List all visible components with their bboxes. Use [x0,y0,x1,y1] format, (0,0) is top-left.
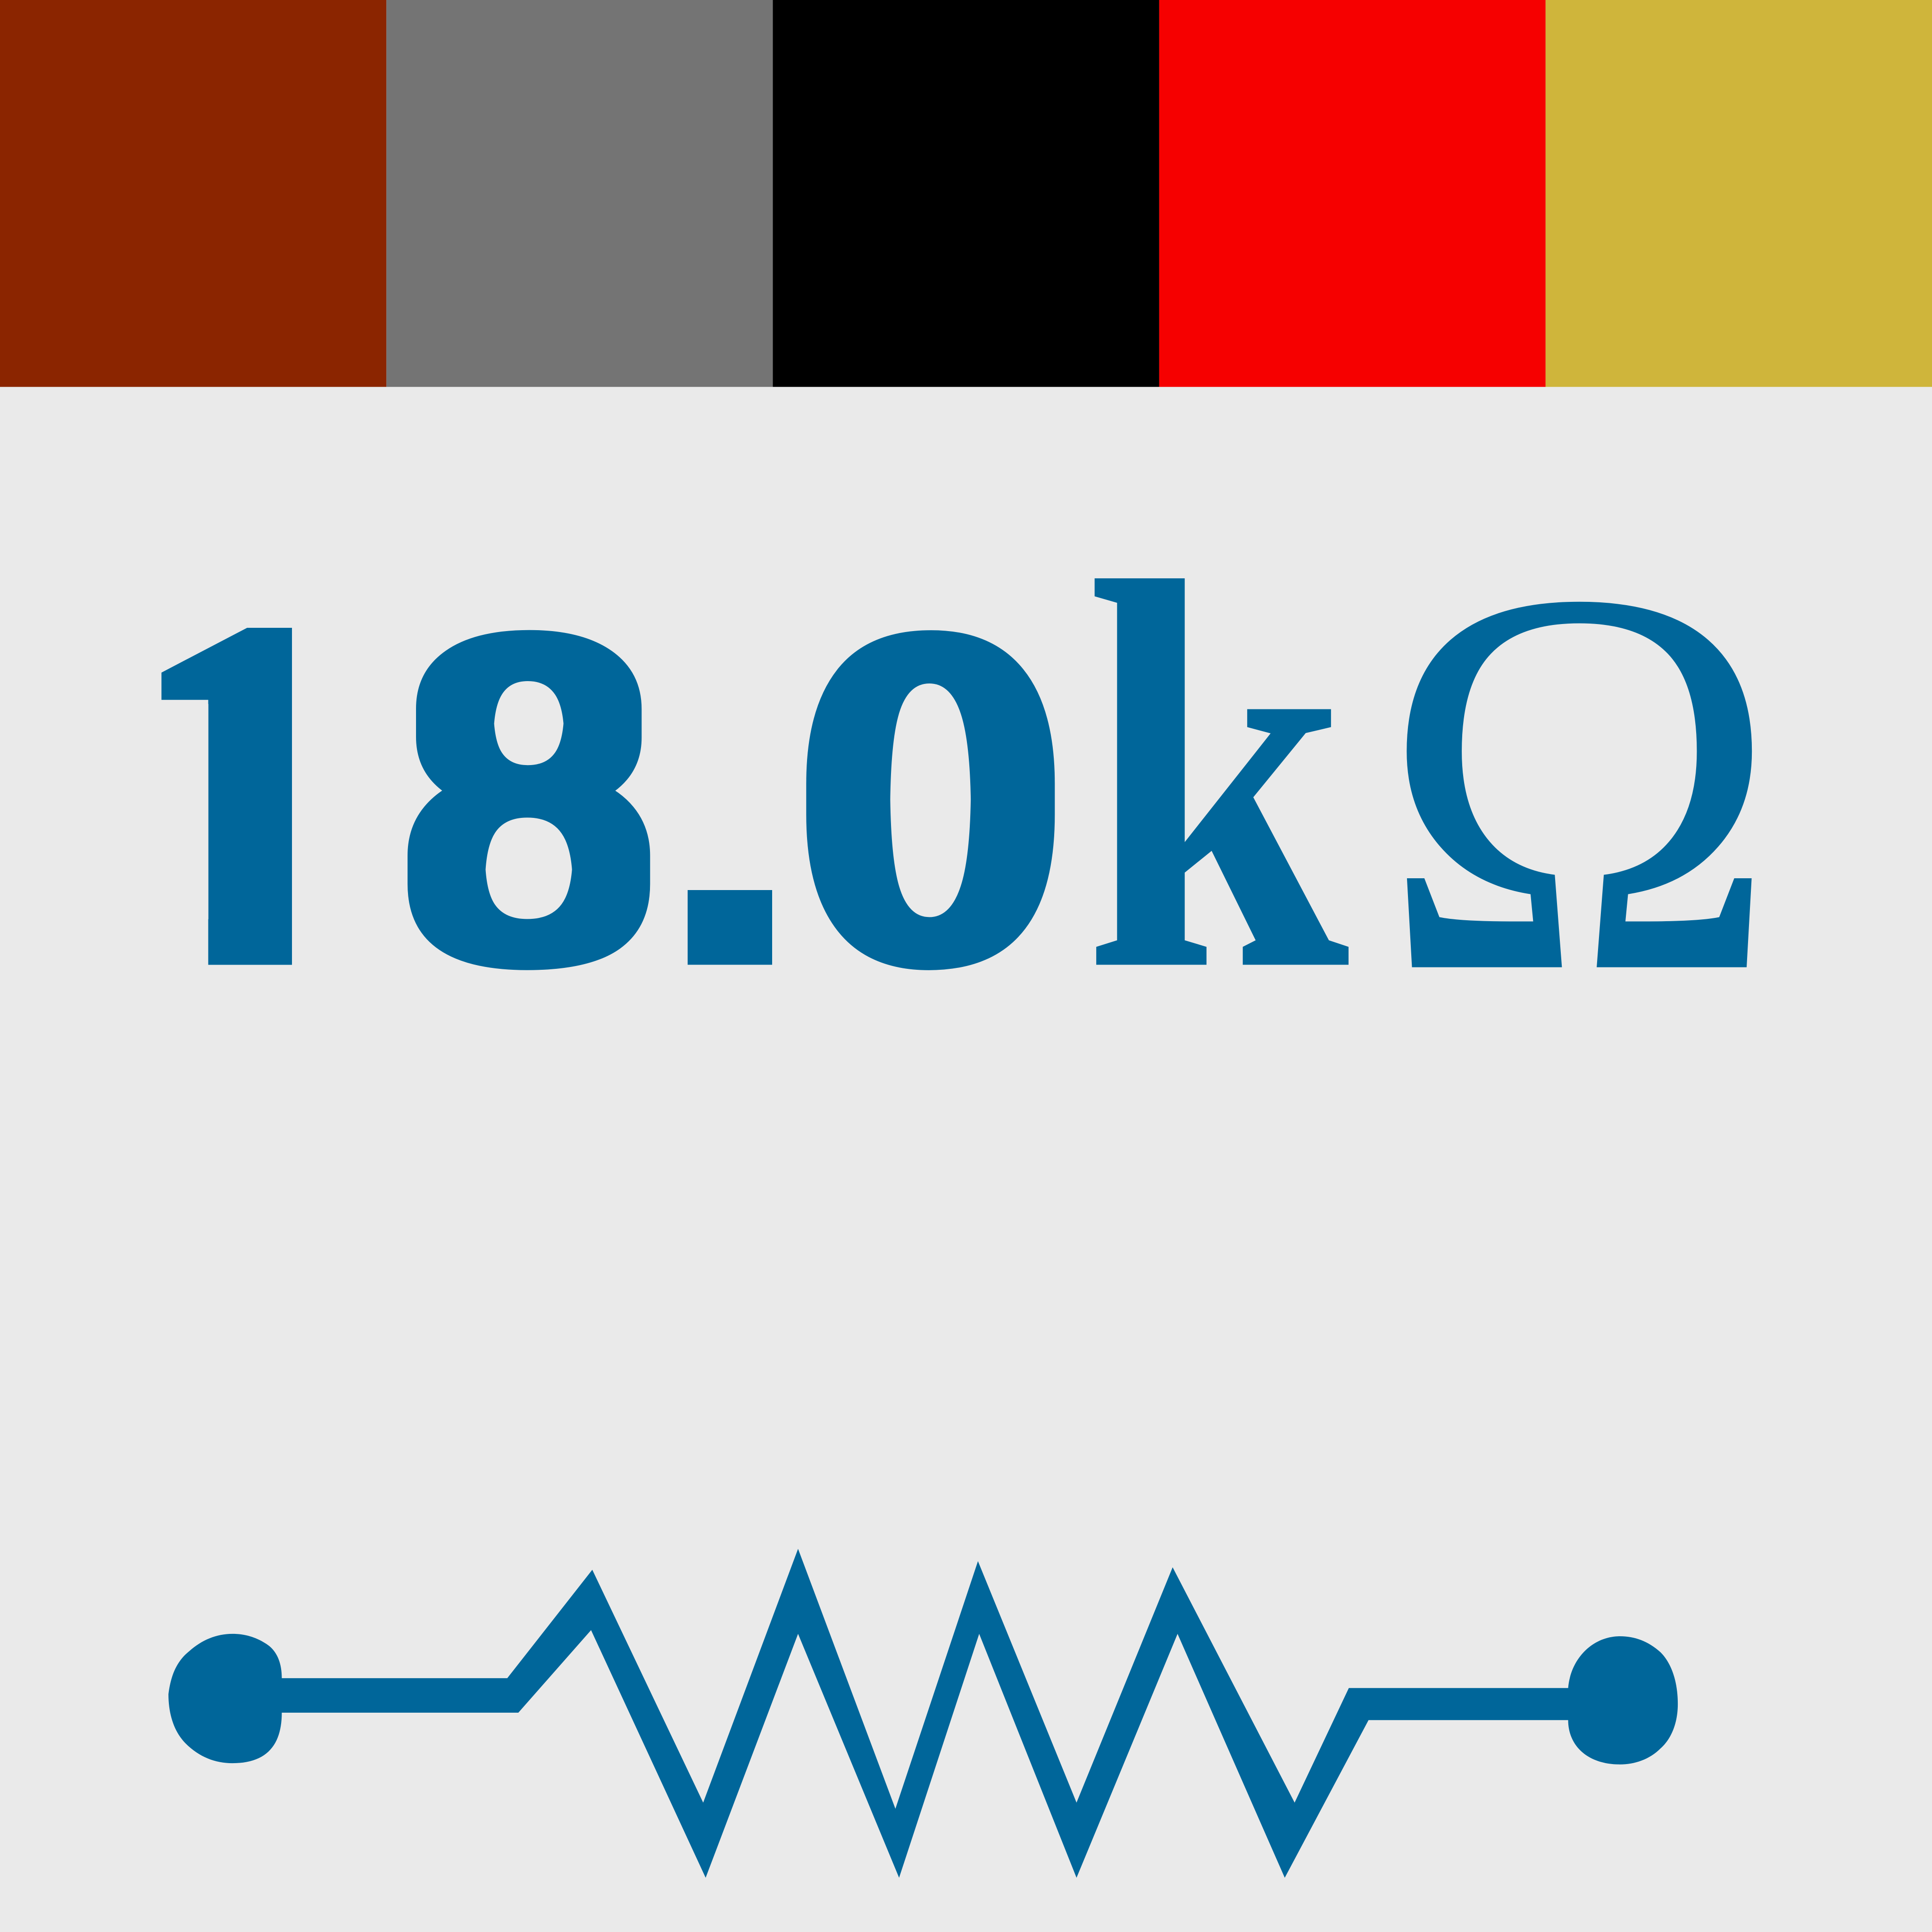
digit 8: 8 [389,540,669,1052]
digit 1: 1 [108,527,378,1059]
omega symbol: Ω [1379,476,1780,1087]
band: gold [1546,0,1932,387]
band: black [773,0,1159,387]
band: red [1159,0,1546,387]
letter k: k [1083,469,1352,1086]
band: grey [386,0,773,387]
resistance value heading [108,469,1780,1087]
resistor symbol [168,1549,1678,1878]
colour bands [0,0,1932,387]
decimal point: . [647,511,813,1071]
digit 0: 0 [784,542,1077,1050]
band: brown [0,0,386,387]
